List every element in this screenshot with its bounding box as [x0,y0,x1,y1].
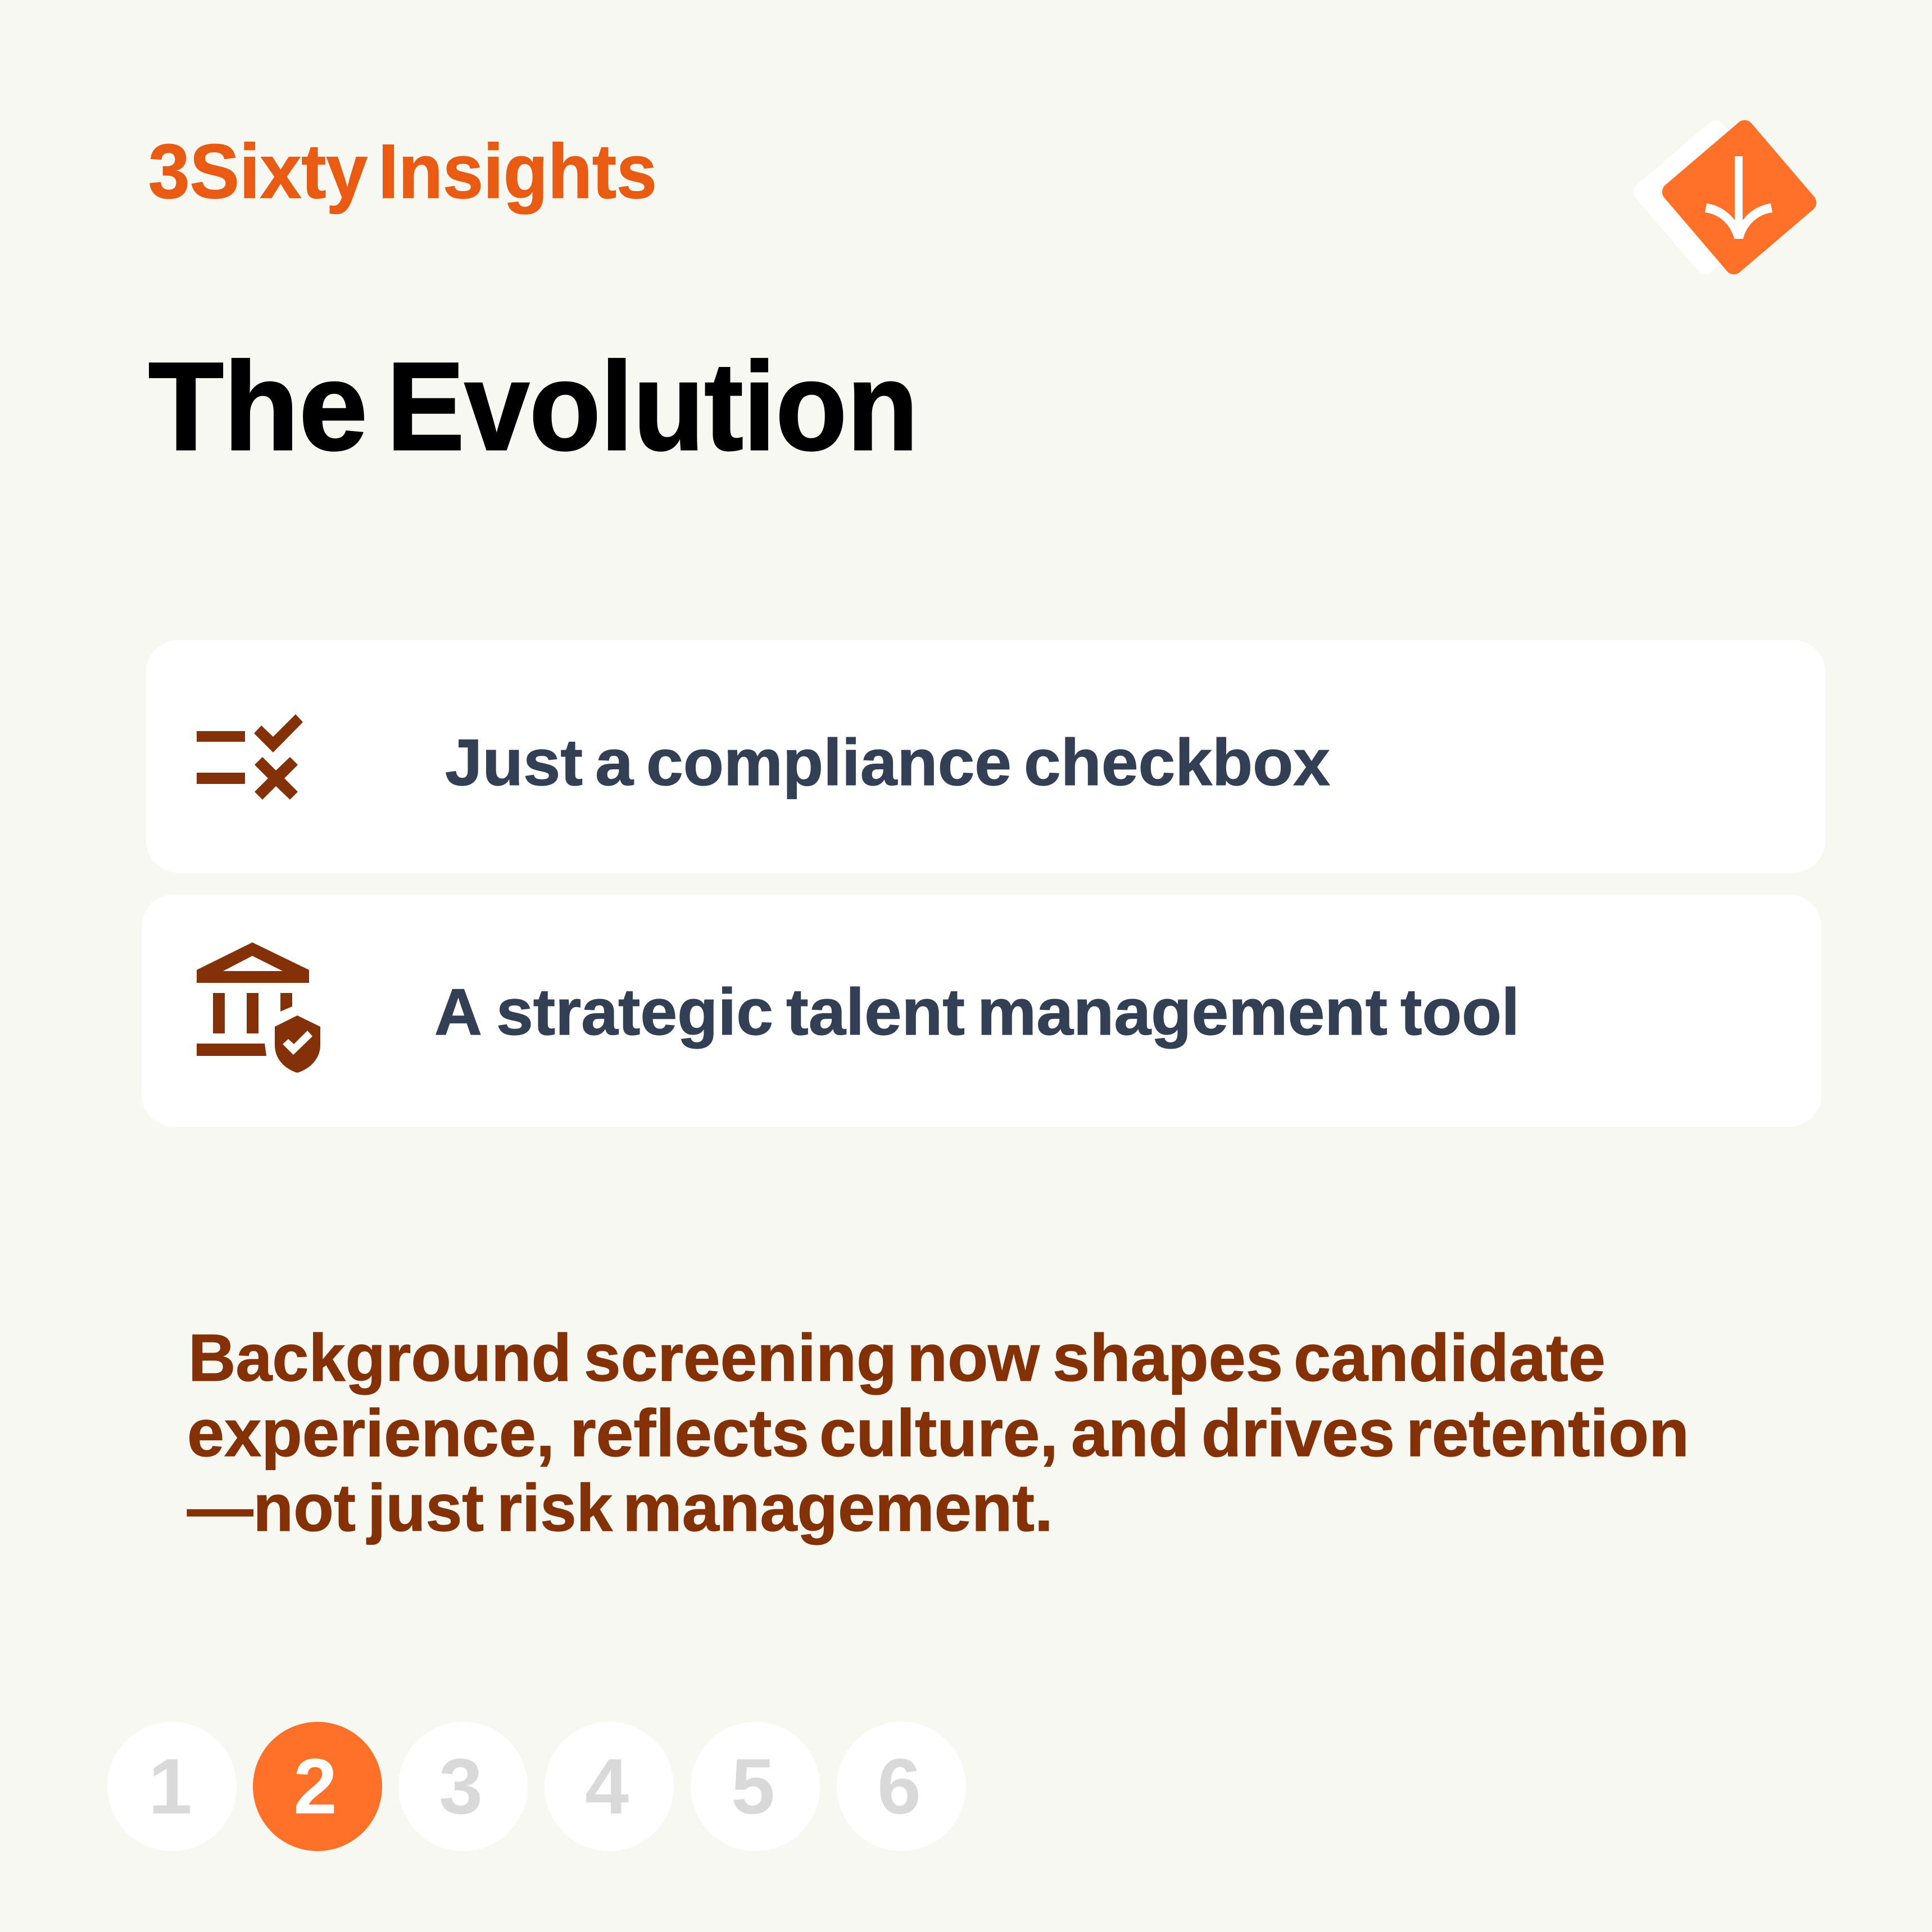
text block: summary statement: shapes [1053,1321,1283,1395]
text block: summary statement: culture, [819,1396,1058,1471]
text: strategic talent management tool: management [977,975,1387,1049]
text block: summary statement: now [907,1321,1040,1395]
text: strategic talent management tool: talent [786,975,965,1049]
text block: summary statement: Background [188,1321,572,1395]
text block: summary statement: and [1071,1396,1189,1471]
page 3: 3 [439,1742,483,1830]
page 4 [545,1722,674,1851]
text block: summary statement: just [366,1471,484,1545]
pagination [107,1722,966,1851]
text block: summary statement: drives [1201,1396,1395,1471]
icon: logo diamond [1630,116,1820,278]
text: strategic talent management tool: A [434,975,482,1049]
text: strategic talent management tool [434,975,1520,1049]
page 2 active: 2 [293,1742,337,1830]
title: Evolution [387,337,918,477]
text block: summary statement [187,1321,1689,1545]
text: compliance checkbox: Just [445,725,583,799]
page 1 [107,1722,237,1851]
page 6: 6 [877,1742,921,1830]
brand name [148,129,657,215]
page 3 [398,1722,528,1851]
page 2 active [253,1722,382,1851]
text: strategic talent management tool: tool [1400,975,1520,1049]
text block: summary statement: screening [584,1321,897,1395]
text block: summary statement: risk [497,1471,613,1545]
panel: compliance checkbox [146,640,1825,873]
text block: summary statement: experience, [187,1396,555,1471]
page 6 [837,1722,966,1851]
text: compliance checkbox [445,725,1330,799]
text: compliance checkbox: compliance [646,725,1012,799]
page 5: 5 [731,1742,775,1830]
title: The [148,337,368,477]
icon: institution with shield [197,942,320,1073]
text block: summary statement: reflects [570,1396,809,1471]
text: compliance checkbox: checkbox [1024,725,1330,799]
title [148,337,918,477]
page 5 [691,1722,820,1851]
icon: check and cross list [197,714,303,800]
text block: summary statement: management. [623,1471,1053,1545]
text: strategic talent management tool: strategic [496,975,773,1049]
brand name: 3Sixty [148,129,368,215]
text block: summary statement: candidate [1294,1321,1606,1395]
page 4: 4 [585,1742,629,1830]
text: compliance checkbox: a [595,725,634,799]
panel: strategic talent tool [142,895,1821,1127]
page 1: 1 [148,1742,192,1830]
brand name: Insights [378,129,657,215]
text block: summary statement: —not [187,1471,356,1545]
text block: summary statement: retention [1406,1396,1689,1471]
